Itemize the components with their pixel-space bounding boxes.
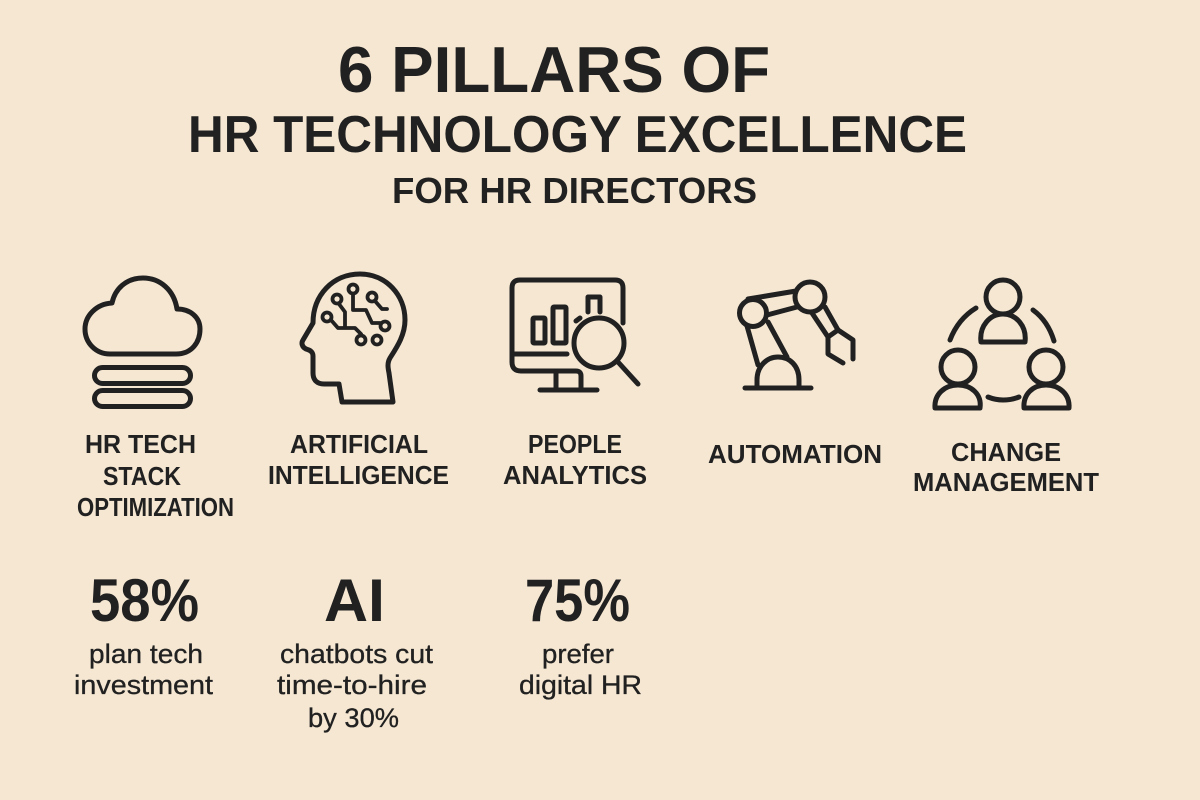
stat caption: plan tech (89, 639, 203, 669)
label: artificial intelligence: INTELLIGENCE (268, 460, 449, 490)
stat caption: chatbots cut (280, 639, 434, 669)
label: people analytics (503, 429, 647, 490)
icon: head with circuit brain (302, 274, 405, 402)
label: people analytics: PEOPLE (528, 429, 622, 459)
label: change management (913, 437, 1099, 497)
stat caption: prefer (542, 639, 614, 669)
panel: automation (708, 282, 882, 469)
stat: 75% prefer digital HR (519, 567, 642, 700)
label: HR tech stack optimization: STACK (103, 461, 181, 491)
label: HR tech stack optimization: HR TECH (85, 429, 196, 459)
label: change management: MANAGEMENT (913, 467, 1099, 497)
label: automation: AUTOMATION (708, 439, 882, 469)
stat value: 75%: 75% (525, 567, 630, 634)
stat caption: by 30% (308, 703, 399, 733)
panel: artificial intelligence (268, 274, 449, 490)
stat value: 58%: 58% (90, 567, 199, 634)
icon: three people in a cycle (935, 280, 1069, 408)
stat caption: time-to-hire (277, 670, 427, 700)
icon: robot arm (740, 282, 853, 388)
label: artificial intelligence (268, 429, 449, 490)
panel: change management (913, 280, 1099, 497)
stat: 58% plan tech investment (74, 567, 214, 700)
stat caption (74, 639, 214, 700)
title line 1: 6 PILLARS OF (338, 33, 770, 106)
subtitle: FOR HR DIRECTORS (392, 170, 757, 211)
stat value: AI: AI (324, 567, 385, 634)
stat caption: investment (74, 670, 214, 700)
stat caption (277, 639, 434, 733)
label: HR tech stack optimization: OPTIMIZATION (77, 492, 234, 522)
title (188, 33, 967, 211)
icon: cloud with stacked layers (85, 278, 200, 406)
title line 2: HR TECHNOLOGY EXCELLENCE (188, 106, 967, 164)
stat caption (519, 639, 642, 700)
panel: people analytics (503, 280, 647, 490)
icon: monitor with chart and magnifier (512, 280, 638, 390)
stat caption: digital HR (519, 670, 642, 700)
label: artificial intelligence: ARTIFICIAL (290, 429, 428, 459)
label: HR tech stack optimization (77, 429, 234, 522)
label: people analytics: ANALYTICS (503, 460, 647, 490)
label: change management: CHANGE (951, 437, 1061, 467)
stat: AI chatbots cut time-to-hire by 30% (277, 567, 434, 733)
panel: HR tech stack optimization (77, 278, 234, 522)
